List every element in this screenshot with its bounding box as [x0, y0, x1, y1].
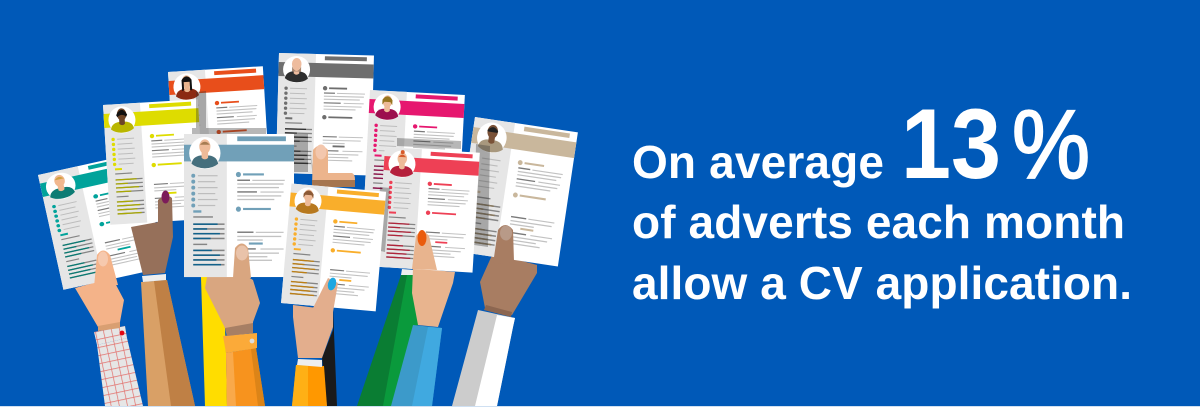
- avatar: man blond: [43, 170, 78, 202]
- avatar: woman olive hair: [373, 93, 401, 121]
- sleeve: black arm behind: [322, 308, 337, 406]
- thumb: hand with blue nail: [312, 277, 338, 312]
- avatar: woman black hair: [173, 73, 201, 101]
- sleeve: green arm behind: [357, 269, 418, 406]
- thumb: tan hand: [233, 244, 251, 278]
- thumb: peach hand: [94, 250, 118, 287]
- avatar: woman brown hair: [293, 186, 323, 216]
- CV card: red: [378, 147, 480, 273]
- sleeve: yellow arm behind: [201, 277, 227, 406]
- avatar: bald bearded man: [283, 56, 310, 83]
- CV card: dark grey: [276, 53, 374, 175]
- arm 2: brown hand with tan sleeve: [131, 190, 195, 406]
- big number 13: 13: [901, 88, 1001, 199]
- shadow from blue-grey card: [192, 91, 308, 172]
- thumb: brown hand: [493, 225, 514, 264]
- arm 5: hand with light blue sleeve: [391, 268, 455, 406]
- line 1: on average: On average: [632, 136, 884, 188]
- headline text: [632, 88, 1132, 309]
- shadow on beige and pink cards: [397, 138, 490, 247]
- shadow on red card: [376, 187, 390, 252]
- hand gripping grey card: [310, 144, 355, 187]
- arm 4: hand with orange sleeve: [292, 305, 333, 406]
- CV card: yellow: [103, 99, 205, 225]
- CV card: pink: [364, 90, 465, 215]
- avatar: man brown hair: [189, 137, 220, 169]
- avatar: red-haired woman: [388, 149, 416, 178]
- line 3: allow a CV application.: [632, 257, 1132, 309]
- arm 3: tan hand with orange cuff: [205, 277, 265, 406]
- percent sign: %: [1012, 90, 1090, 199]
- arm 1: peach hand with plaid sleeve: [75, 282, 143, 406]
- thumb: hand with orange nail: [412, 230, 437, 270]
- CV card: blue-grey: [184, 134, 294, 277]
- CV card: beige: [455, 117, 578, 266]
- CV card: teal: [38, 152, 165, 290]
- CV card: orange: [281, 184, 386, 311]
- CV card: red-orange: [168, 66, 270, 192]
- avatar: woman dark skin: [108, 106, 136, 134]
- line 2: of adverts each month: [632, 196, 1125, 248]
- avatar: man brown skin: [475, 121, 509, 155]
- arm 6: brown hand with white sleeve: [452, 253, 537, 406]
